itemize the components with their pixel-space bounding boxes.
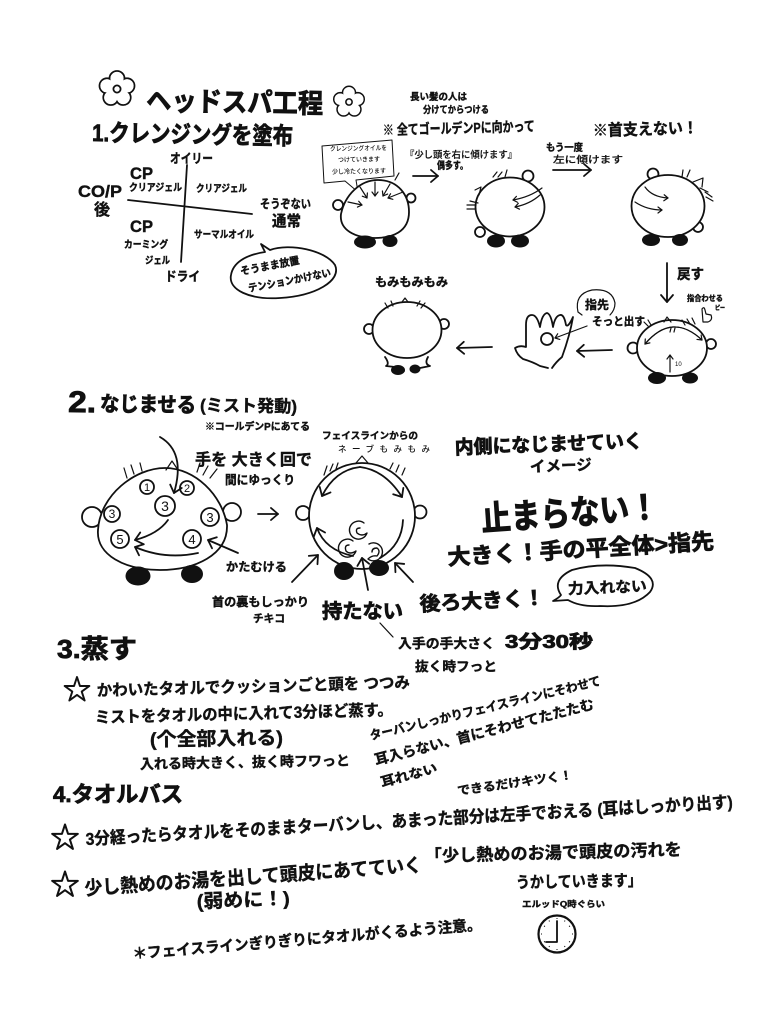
text: script quote: 「少し熱めのお湯で頭皮の汚れを [425,839,682,866]
text: step 4 second item: (弱めに！) [196,889,290,913]
text: big circular hands: 手を 大きく回で [195,450,312,469]
callout: cleansing oil speech box: つけていきます [338,155,380,164]
arrow: head 1 to head 2 [413,175,438,177]
text: insertion note: 抜く時フっと [415,659,497,674]
arrow: return down [666,263,668,302]
text: turban note: 耳れない [379,760,439,790]
arrow: hand to head 5 [457,347,492,348]
illustration: head A with numbered points [82,437,241,586]
text: long hair note: 長い髪の人は [410,91,467,103]
text: tilt head right: 『少し頭を右に傾けます』 [405,149,517,161]
chart: skin type matrix: 後 [94,200,110,219]
callout: leave as is [231,244,336,298]
text: tilt: かたむける [226,560,287,574]
text: massage: もみもみもみ [375,275,448,289]
chart: skin type matrix: オイリー [170,151,213,166]
illustration: head 4 [628,317,716,384]
illustration: hand [515,313,587,368]
heading: step 2: 2. [68,386,96,419]
numbered points: 1 [144,482,150,494]
illustration: head 5 massage [364,298,449,375]
title [100,71,364,119]
text: step 3 body [95,673,410,772]
text: insertion note: 入手の手大さく [398,636,495,651]
text: align fingers: ピー [715,305,725,312]
text: blend inward: イメージ [530,457,592,476]
text: big circular hands: 間にゆっくり [225,473,295,487]
chart: skin type matrix: そうぞない [260,197,311,211]
text: golden point note: ※ 全てゴールデンPに向かって [383,118,535,138]
heading: step 2: (ミスト発動) [200,396,297,416]
text: step 4 second item: 少し熱めのお湯を出して頭皮にあてていく [84,854,423,900]
heading: step 1: 1.クレンジングを塗布 [92,119,293,151]
text: tilt head left: もう一度 [546,141,583,154]
text: big palm over fingertips: 大きく！手の平全体>指先 [447,529,715,570]
numbered points: 2 [184,483,190,495]
text: insertion note [380,623,497,674]
text: back of neck: 首の裏もしっかり [212,594,309,609]
illustration: head 4: 10 [675,362,682,368]
text: big circular hands [195,450,312,487]
arrow: back pointer [395,563,413,582]
callout: no force [553,565,653,606]
numbered points: 5 [116,532,124,547]
text: long hair note: 分けてからつける [423,104,489,116]
text: turban note [368,674,602,790]
text: align fingers [687,293,725,312]
callout: cleansing oil speech box: 少し冷たくなります [332,166,386,176]
chart: skin type matrix: CP [130,164,153,183]
callout: cleansing oil speech box: クレンジングオイルを [330,143,387,153]
text: long hair note [410,91,489,116]
chart: skin type matrix: CP [130,217,153,236]
text: tilt head left: 左に傾けます [553,154,623,166]
text: from face line: ネーブもみもみ [338,444,430,454]
numbered points: 3 [206,510,214,525]
callout: fingertips: 指先 [585,297,609,312]
chart: skin type matrix: クリアジェル [129,182,182,194]
chart: skin type matrix: カーミング [124,238,168,251]
chart: skin type matrix: クリアジェル [196,183,247,195]
text: turban note: ターバンしっかりフェイスラインにそわせて [368,674,602,743]
numbered points: 4 [188,532,196,547]
chart: skin type matrix: ドライ [165,269,200,284]
callout: leave as is: そうまま放置 [239,254,301,278]
text: tilt head right [405,149,517,172]
chart: skin type matrix [78,151,311,284]
heading: step 3: 3.蒸す [57,634,137,664]
chart: skin type matrix: サーマルオイル [194,229,254,241]
text: from face line: フェイスラインからの [322,431,418,442]
numbered points: 3 [161,498,169,514]
text: turban note: 耳入らない、首にそわせてたたたむ [373,696,596,768]
icon: small hand [702,308,712,322]
illustration: head B with spirals [296,456,426,580]
heading: step 2: なじませる [100,393,196,417]
illustration: head 2 tilted [467,170,544,248]
text: as tight as possible: できるだけキツく！ [456,768,573,798]
callout: fingertips [577,290,645,328]
text: step 3 body: 入れる時大きく、抜く時フワっと [140,752,350,772]
text: back of neck: チキコ [253,612,285,625]
callout: fingertips: そっと出す [592,315,645,328]
text: from face line [322,431,430,454]
illustration: head 3 tilted [632,168,713,246]
arrow: neck pointer [292,555,318,582]
text: blend inward [454,430,643,476]
icon: flower right [334,86,364,116]
text: script quote [425,839,682,892]
text: return: 戻す [677,266,704,282]
text: step 3 body: (个全部入れる) [150,727,283,751]
title text: ヘッドスパ工程 [146,86,323,119]
text: align fingers: 指合わせる [687,293,723,303]
text: tilt head right: 偶多す。 [437,159,468,172]
text: script quote: うかしていきます」 [516,872,642,892]
text: golden point: ※コールデンPにあてる [205,420,310,433]
icon: flower left [100,71,134,105]
callout: leave as is: テンションかけない [247,267,332,295]
text: step 3 body: ミストをタオルの中に入れて3分ほど蒸す。 [95,701,393,727]
chart: skin type matrix: 通常 [272,213,301,230]
callout: cleansing oil speech box [322,140,394,192]
numbered points: 3 [109,507,116,521]
chart: skin type matrix: CO/P [78,182,122,201]
icon: star step 4 b [52,872,78,896]
icon: star step 4 a [52,824,78,849]
arrow: head 4 to hand [577,350,612,351]
arrow: head A to head B [258,513,278,515]
text: back of neck [212,594,309,625]
text: face line note: ＊フェイスラインぎりぎりにタオルがくるよう注意。 [132,916,482,963]
arrow: tilt pointer [208,540,238,553]
heading: step 4: 4.タオルバス [53,782,183,807]
text: step 3 body: かわいたタオルでクッションごと頭を つつみ [97,673,410,700]
numbered points [104,480,219,548]
arrow: do not hold pointer [362,558,368,590]
heading: step 2 [68,386,297,419]
chart: skin type matrix: ジェル [145,255,170,267]
icon: star step 3 [65,677,89,701]
text: do not support neck: ※首支えない！ [593,118,698,140]
text: don't stop: 止まらない！ [480,489,660,539]
text: tilt head left [546,141,623,166]
text: duration: 3分30秒 [505,632,593,652]
callout: no force: 力入れない [568,578,647,598]
text: back big: 後ろ大きく！ [419,586,545,616]
icon: clock [538,916,576,952]
text: do not hold: 持たない [322,600,403,623]
arrow: head 2 to head 3 [553,169,591,171]
illustration: head 1 with oil arrows [333,173,416,248]
text: clock caption: エルッドQ時ぐらい [522,899,605,909]
text: blend inward: 内側になじませていく [454,430,643,459]
